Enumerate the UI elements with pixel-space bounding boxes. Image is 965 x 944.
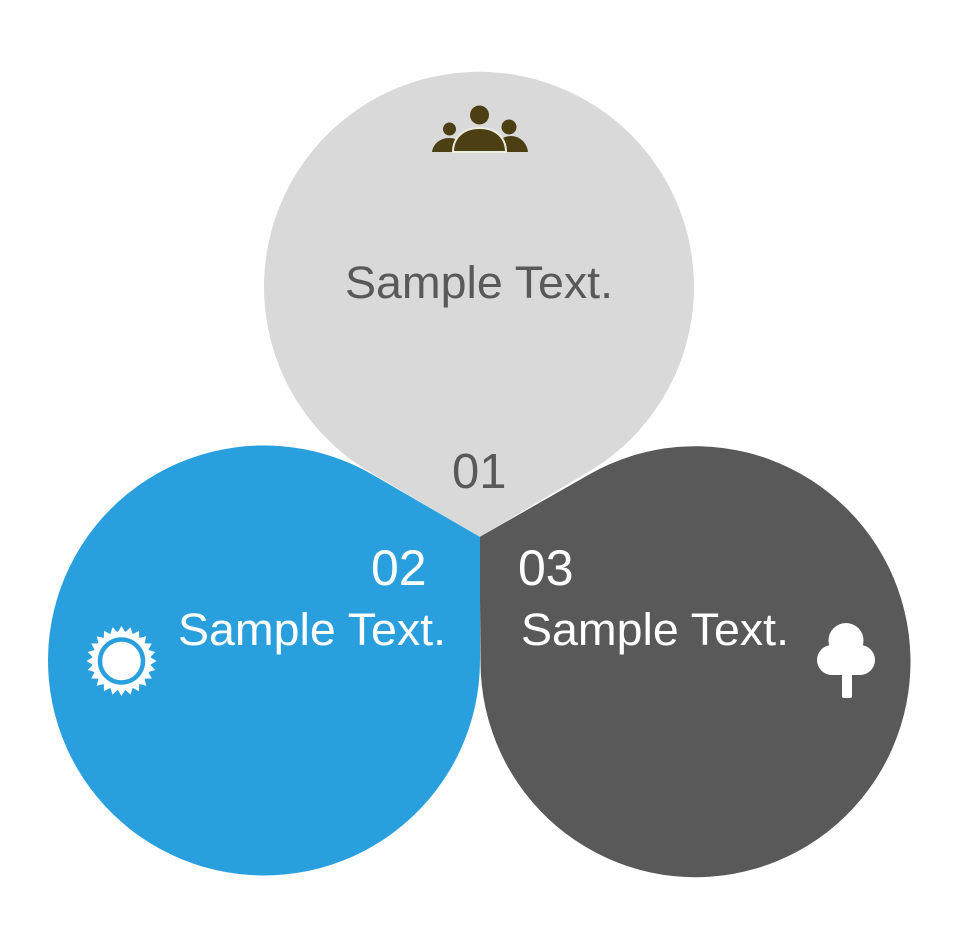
- dark teardrop shape: [480, 446, 910, 877]
- icon: tree: [817, 623, 875, 698]
- grey teardrop shape: [264, 72, 694, 537]
- panel: 03 dark teardrop: [480, 446, 910, 877]
- panel: 02 blue teardrop: [48, 445, 480, 875]
- blue teardrop shape: [48, 445, 480, 875]
- number 03: 03: [518, 540, 574, 596]
- text: sample text 02: Sample Text.: [178, 604, 446, 655]
- icon: sun: [86, 626, 156, 696]
- text: sample text 01: Sample Text.: [345, 257, 613, 308]
- text: sample text 03: Sample Text.: [521, 604, 789, 655]
- number 02: 02: [371, 540, 427, 596]
- icon: people: [432, 106, 528, 152]
- number 01: 01: [452, 445, 507, 499]
- panel: 01 grey teardrop: [264, 72, 694, 537]
